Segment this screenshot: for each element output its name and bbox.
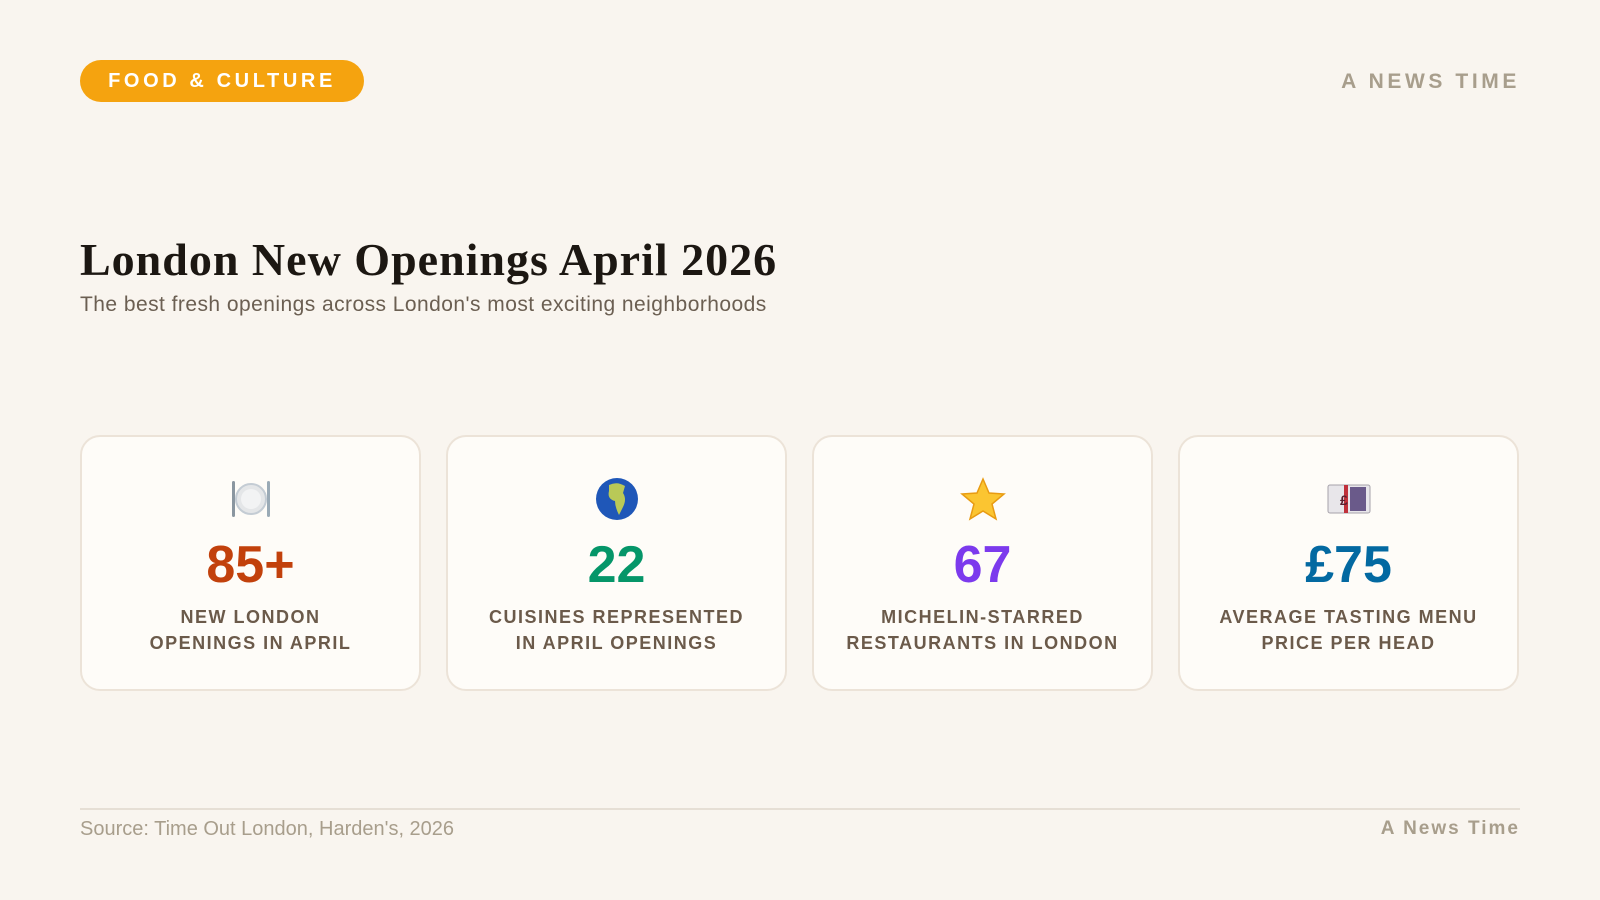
number: 22 <box>588 536 645 594</box>
label <box>489 607 744 653</box>
icon: star <box>960 477 1006 521</box>
icon: globe <box>596 478 638 520</box>
category pill <box>80 60 364 102</box>
label <box>150 607 351 653</box>
brand: A NEWS TIME <box>1341 70 1520 93</box>
icon: banknotes: £ <box>1340 492 1348 508</box>
label <box>846 607 1119 653</box>
label: IN APRIL OPENINGS <box>516 633 717 653</box>
label: AVERAGE TASTING MENU <box>1219 607 1478 627</box>
label <box>1219 607 1478 653</box>
number: 67 <box>954 536 1011 594</box>
card: cuisines <box>446 435 787 691</box>
footer brand: A News Time <box>1381 818 1520 839</box>
icon: banknotes <box>1328 484 1370 514</box>
title: London New Openings April 2026 <box>80 234 777 285</box>
icon: plate <box>232 481 270 517</box>
label: CUISINES REPRESENTED <box>489 607 744 627</box>
card: michelin <box>812 435 1153 691</box>
subtitle: The best fresh openings across London's most exciting neighborhoods <box>80 293 767 316</box>
number: 85+ <box>206 536 295 594</box>
label: PRICE PER HEAD <box>1261 633 1436 653</box>
source: Source: Time Out London, Harden's, 2026 <box>80 818 454 840</box>
label: OPENINGS IN APRIL <box>150 633 351 653</box>
label: MICHELIN-STARRED <box>881 607 1084 627</box>
label: RESTAURANTS IN LONDON <box>846 633 1119 653</box>
label: NEW LONDON <box>180 607 320 627</box>
card: price <box>1178 435 1519 691</box>
number: £75 <box>1305 536 1392 594</box>
card: openings <box>80 435 421 691</box>
category pill: FOOD & CULTURE <box>108 70 336 92</box>
